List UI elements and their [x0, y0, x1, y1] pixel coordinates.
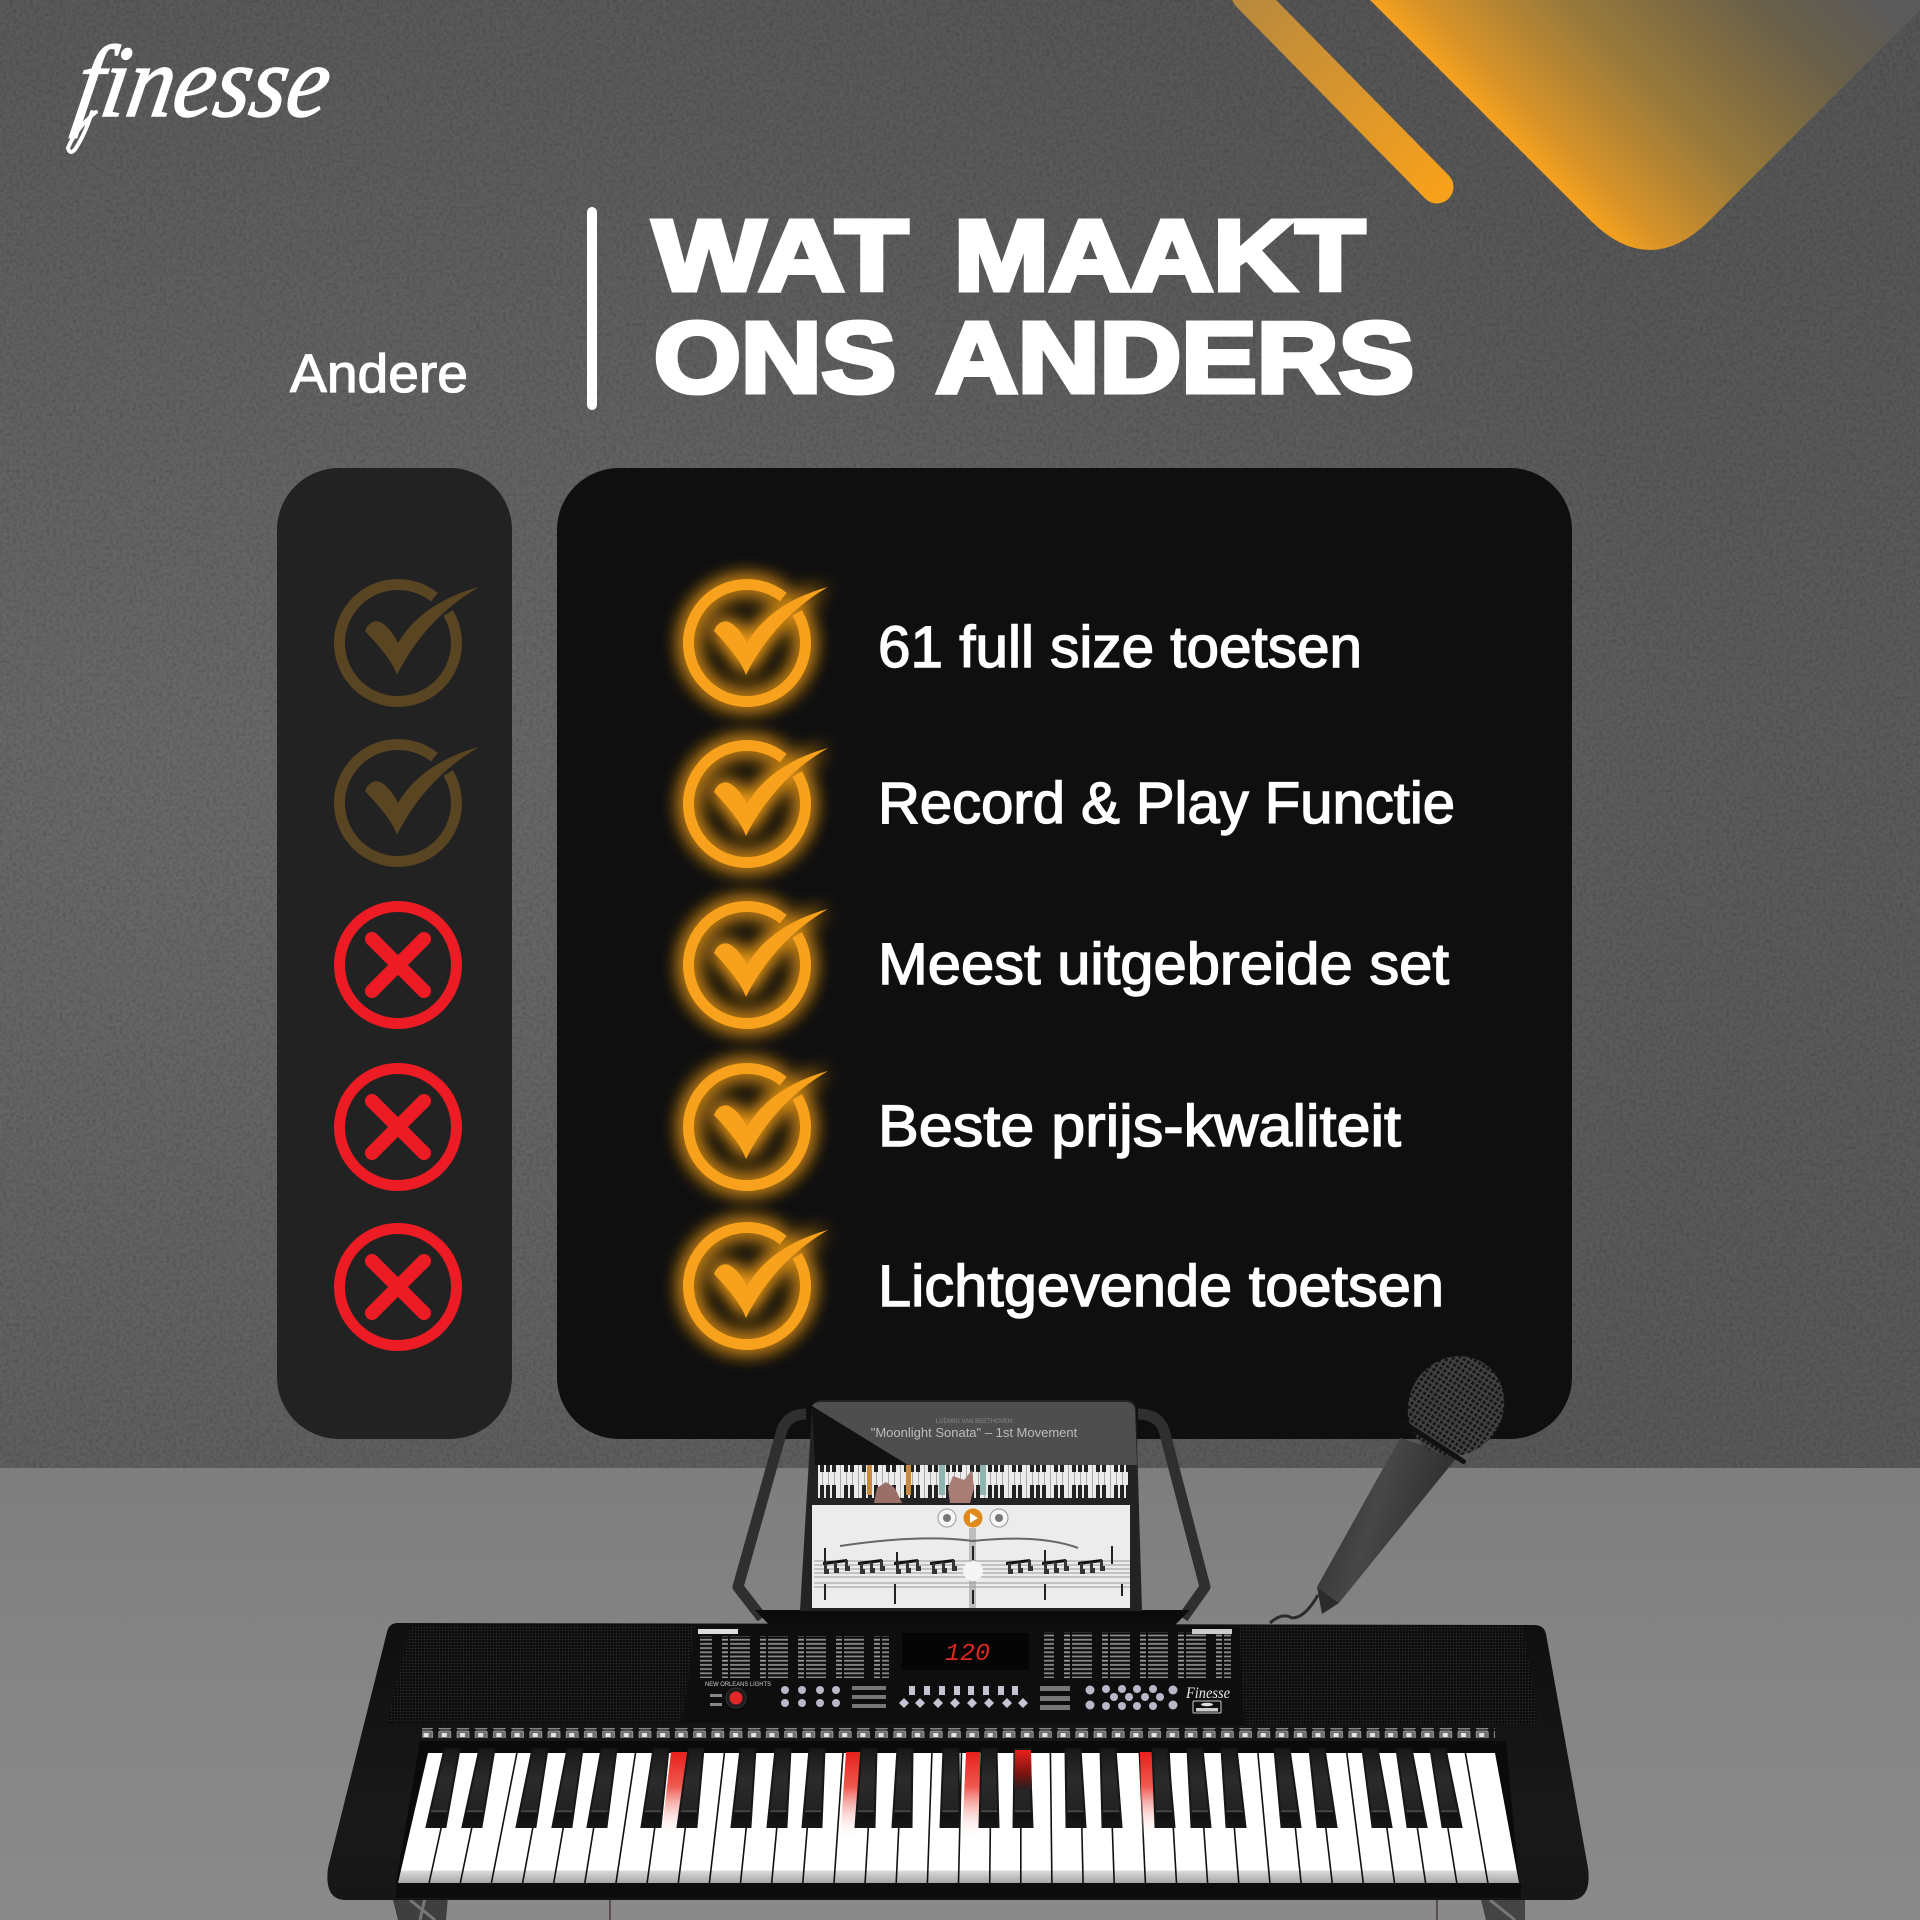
- icon: glowing check 3: [688, 906, 828, 1023]
- heading: ANDERS: [936, 302, 1414, 414]
- control panel: 120: [945, 1641, 990, 1668]
- control panel: [682, 1625, 1244, 1725]
- keyboard: [327, 1623, 1589, 1920]
- brand line and power switch: NEW ORLEANS LIGHTS: [705, 1681, 772, 1688]
- right buttons: [1086, 1685, 1178, 1710]
- decorative orange diamond: [1370, 0, 1920, 250]
- sheet music area: [812, 1505, 1130, 1608]
- floor: [0, 1468, 1920, 1920]
- white key dividers: [429, 1753, 1488, 1883]
- icon: faded check 2: [339, 744, 479, 861]
- feature labels: [878, 615, 1455, 1319]
- left buttons: [781, 1686, 886, 1708]
- feature labels: Lichtgevende toetsen: [878, 1254, 1444, 1319]
- centre buttons: [899, 1686, 1070, 1710]
- front rail: [396, 1883, 1521, 1898]
- icon: red cross 1: [340, 906, 456, 1024]
- function key strip: [422, 1728, 1495, 1738]
- lit red keys: [661, 1752, 1160, 1840]
- panel: others: [277, 468, 512, 1439]
- app title: "Moonlight Sonata" – 1st Movement: [871, 1425, 1078, 1440]
- display: [902, 1633, 1029, 1670]
- icon: glowing check 5: [688, 1227, 828, 1344]
- tablet with piano lesson app: [800, 1400, 1142, 1611]
- black keys: [426, 1749, 1462, 1827]
- keyboard brand: Finesse: [1185, 1685, 1230, 1702]
- feature labels: Meest uitgebreide set: [878, 932, 1449, 997]
- heading: WAT: [653, 200, 908, 312]
- heading divider: [587, 207, 597, 410]
- keyboard body: [327, 1623, 1589, 1900]
- icon: glowing check 2: [688, 745, 828, 862]
- keyboard legs: [392, 1896, 1525, 1920]
- feature labels: 61 full size toetsen: [878, 615, 1362, 680]
- icon: faded check 1: [339, 584, 479, 701]
- hands: [874, 1482, 902, 1503]
- on-screen piano: [818, 1465, 1128, 1498]
- icon: glowing check 1: [688, 584, 828, 701]
- music stand: [738, 1414, 1205, 1650]
- panel: finesse features: [557, 468, 1572, 1439]
- app title: LUDWIG VAN BEETHOVEN: [936, 1419, 1012, 1425]
- speaker left: [387, 1625, 695, 1723]
- heading: MAAKT: [954, 200, 1365, 312]
- playback buttons: [938, 1508, 1008, 1528]
- decorative orange stripe: [1248, 0, 1437, 187]
- lit black key: [1014, 1750, 1032, 1790]
- staves and notes: [814, 1538, 1130, 1604]
- icon: red cross 2: [340, 1068, 456, 1186]
- icon: glowing check 4: [688, 1068, 828, 1185]
- background wall: [0, 0, 1920, 1468]
- song lists: [700, 1636, 889, 1678]
- icon: red cross 3: [340, 1228, 456, 1346]
- column label: Andere: Andere: [290, 344, 468, 404]
- microphone: [1270, 1338, 1523, 1623]
- microphone head: [1389, 1338, 1523, 1474]
- heading: [653, 200, 1414, 414]
- feature labels: Beste prijs-kwaliteit: [878, 1094, 1401, 1159]
- logo: finesse: finesse: [68, 26, 340, 139]
- feature labels: Record & Play Functie: [878, 771, 1455, 836]
- keybed: [396, 1741, 1521, 1898]
- heading: ONS: [654, 302, 896, 414]
- speaker right: [1238, 1627, 1539, 1725]
